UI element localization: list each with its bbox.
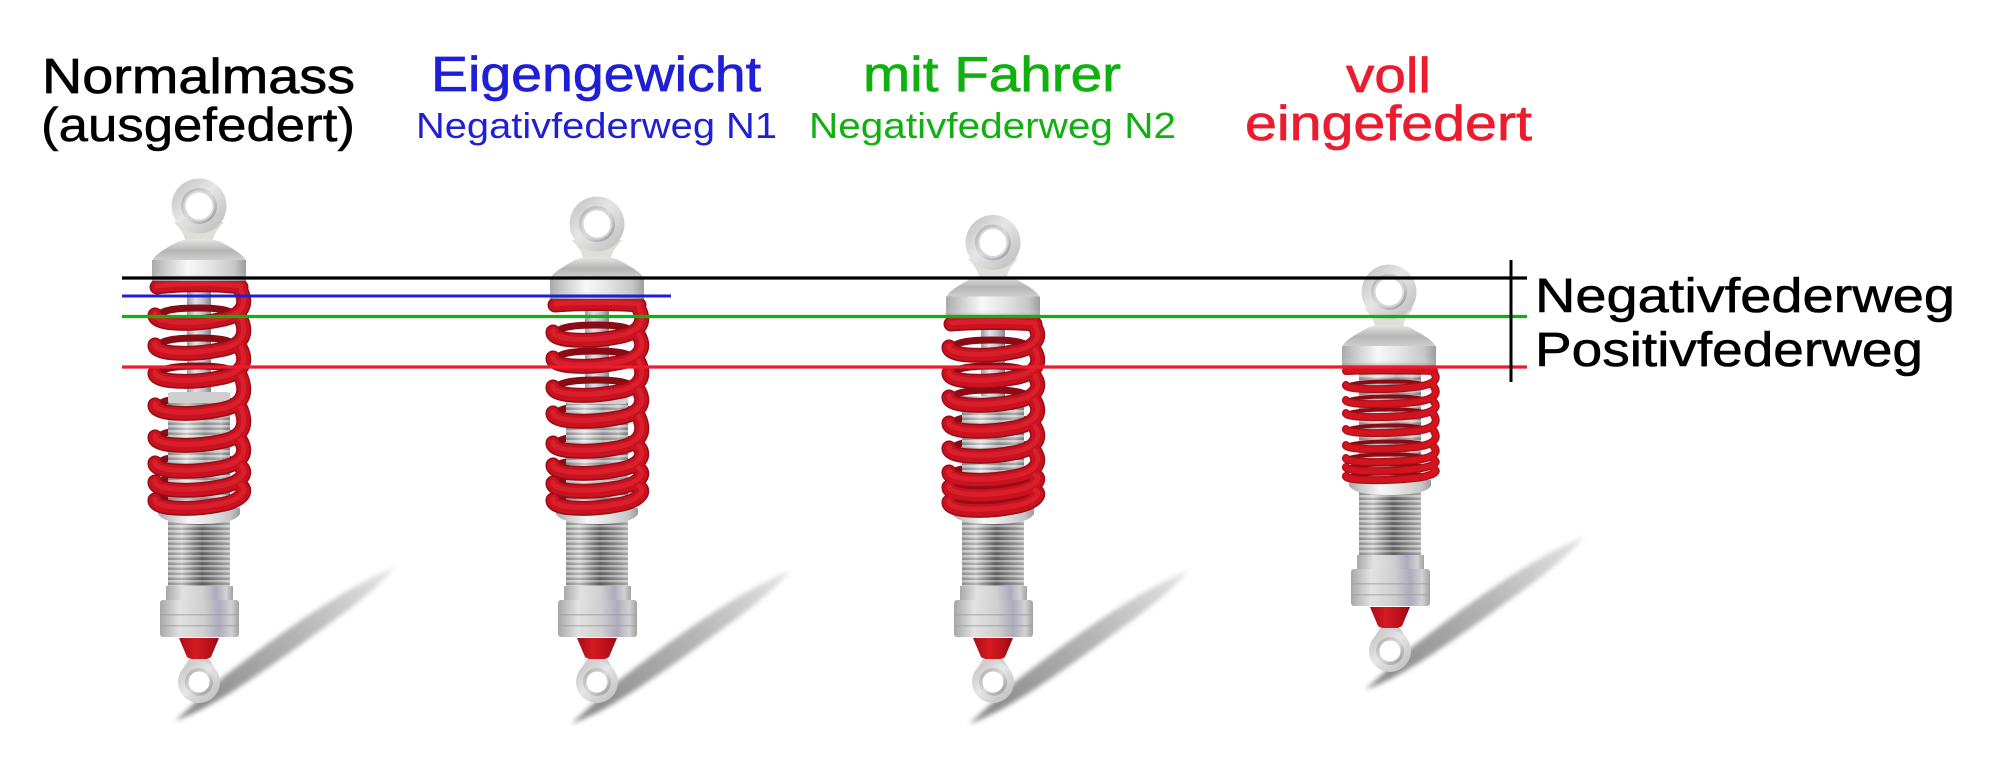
threaded tube inside coil <box>1359 366 1421 484</box>
upper eye and cap <box>152 178 246 281</box>
shock absorber 2: Eigengewicht <box>550 196 791 724</box>
label: Positivfederweg: Positivfederweg <box>1535 324 1923 377</box>
piston rod <box>585 298 609 394</box>
back of coil <box>1346 382 1428 478</box>
shadow <box>571 570 791 724</box>
lower thread body <box>566 520 628 592</box>
coil spring <box>553 302 642 508</box>
back of coil <box>553 325 635 503</box>
title: Normalmass (ausgefedert) <box>41 50 355 151</box>
heading: Eigengewicht: Eigengewicht <box>431 48 761 102</box>
threaded tube inside coil <box>168 392 230 505</box>
threaded tube inside coil <box>566 393 628 505</box>
lower cup, cone and eye <box>160 586 239 703</box>
subheading: Negativfederweg N2: Negativfederweg N2 <box>809 105 1176 146</box>
title: Eigengewicht <box>416 48 777 146</box>
title: voll eingefedert <box>1245 49 1532 151</box>
coil spring <box>1346 370 1436 480</box>
shock absorber 4: voll eingefedert <box>1342 264 1585 690</box>
shadow <box>175 567 395 721</box>
lower thread body <box>1359 491 1421 561</box>
lower cup, cone and eye <box>558 586 637 703</box>
lower spring seat <box>556 508 638 524</box>
lower spring seat <box>952 508 1034 524</box>
upper eye and cap <box>946 215 1040 318</box>
lower spring seat <box>158 508 240 524</box>
reference line: blue, N1 <box>122 294 671 298</box>
reference line: black, Normalmass <box>122 276 1527 280</box>
lower thread body <box>168 520 230 592</box>
title: mit Fahrer <box>809 48 1176 146</box>
back of coil <box>949 340 1031 505</box>
lower cup, cone and eye <box>954 586 1033 703</box>
heading: eingefedert: eingefedert <box>1245 97 1532 151</box>
reference line: green, N2 <box>122 315 1527 318</box>
back of coil <box>155 308 237 503</box>
upper eye and cap <box>550 196 644 299</box>
heading: mit Fahrer: mit Fahrer <box>863 48 1121 102</box>
coil spring <box>155 284 244 508</box>
reference line: red, voll eingefedert <box>122 365 1527 369</box>
lower thread body <box>962 520 1024 592</box>
subheading: Negativfederweg N1: Negativfederweg N1 <box>416 105 777 146</box>
subheading: (ausgefedert): (ausgefedert) <box>41 98 355 151</box>
coil spring <box>949 322 1038 510</box>
lower spring seat <box>1349 480 1431 495</box>
shadow <box>1365 536 1585 690</box>
lower cup, cone and eye <box>1351 555 1430 672</box>
shock absorber 3: mit Fahrer <box>946 215 1189 724</box>
shock absorber 1: Normalmass <box>152 178 395 721</box>
heading: Normalmass: Normalmass <box>42 50 355 104</box>
label: Negativfederweg: Negativfederweg <box>1535 270 1955 323</box>
piston rod <box>981 316 1005 396</box>
dimension bar <box>1510 260 1512 382</box>
shadow <box>969 570 1189 724</box>
heading: voll: voll <box>1346 49 1431 103</box>
piston rod <box>187 280 211 394</box>
threaded tube inside coil <box>962 396 1024 505</box>
upper eye and cap <box>1342 264 1436 367</box>
